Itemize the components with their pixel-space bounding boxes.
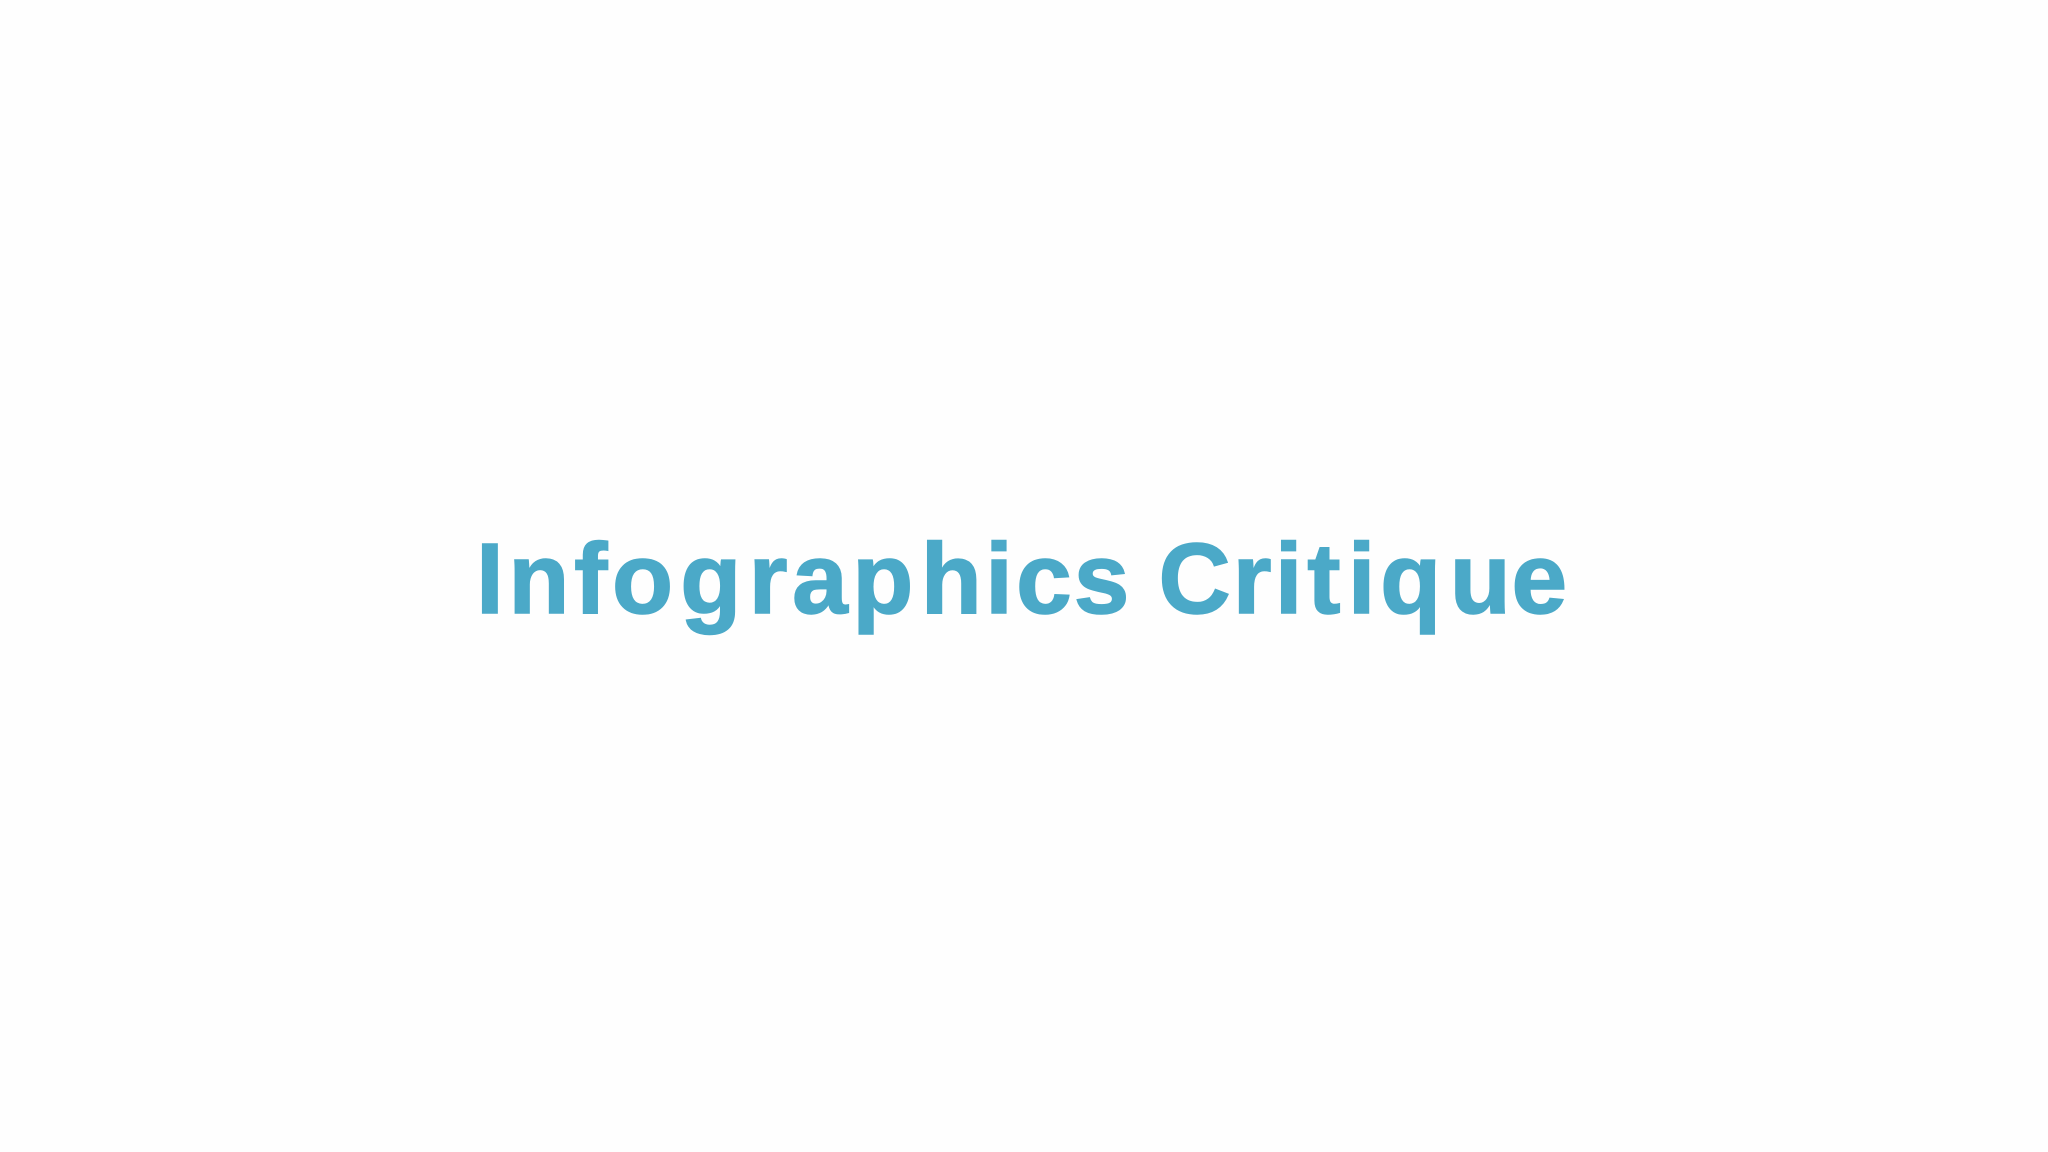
title: Infographics Critique (476, 523, 1567, 635)
